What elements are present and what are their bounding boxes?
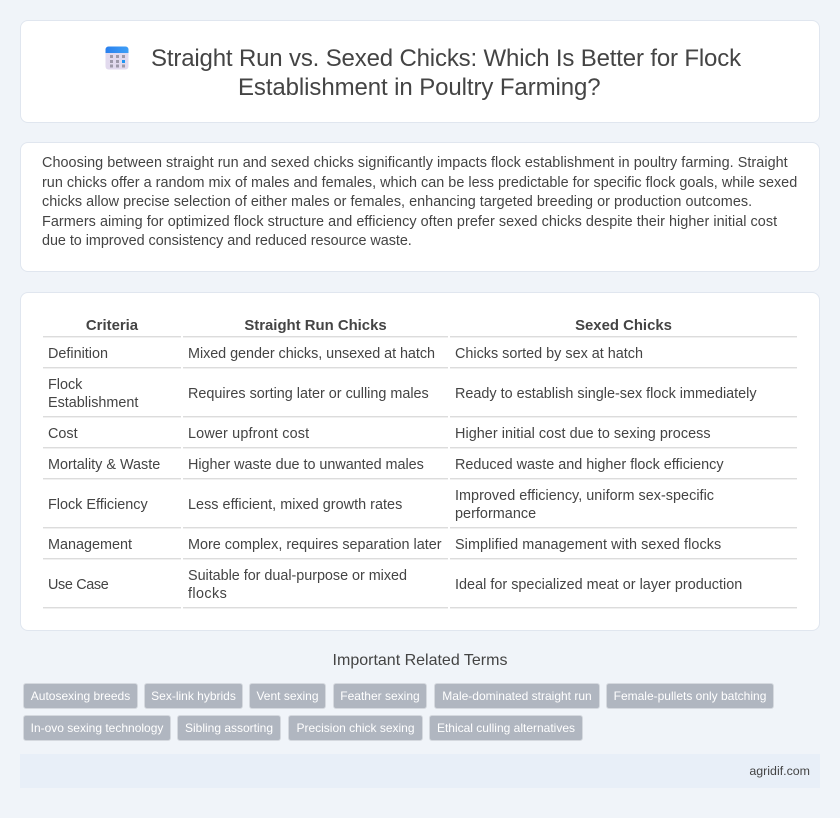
table header: Sexed Chicks: Sexed Chicks <box>575 318 672 334</box>
intro text: due to improved consistency and reduced resource waste. <box>42 233 412 249</box>
intro text <box>42 155 797 249</box>
table rows: Simplified management with sexed flocks <box>455 537 721 553</box>
table rows: More complex, requires separation later <box>188 537 442 553</box>
table rows: Establishment <box>48 395 138 411</box>
table rows: Higher waste due to unwanted males <box>188 457 424 473</box>
table rows: Mixed gender chicks, unsexed at hatch <box>188 346 435 362</box>
table rows: Higher initial cost due to sexing process <box>455 426 711 442</box>
table rows: Reduced waste and higher flock efficiency <box>455 457 724 473</box>
table rows: Flock <box>48 377 82 393</box>
table rows: Less efficient, mixed growth rates <box>188 497 402 513</box>
table rows: Definition <box>48 346 108 362</box>
table rows <box>43 336 797 609</box>
table rows: Cost <box>48 426 78 442</box>
title: Establishment in Poultry Farming? <box>238 74 601 101</box>
table rows: performance <box>455 506 536 522</box>
table header: Criteria: Criteria <box>86 318 138 334</box>
table rows: Ideal for specialized meat or layer production <box>455 577 742 593</box>
header panel <box>20 20 820 123</box>
table rows: Use Case <box>48 577 108 593</box>
table rows: Requires sorting later or culling males <box>188 386 429 402</box>
related terms tags: In-ovo sexing technology <box>31 721 163 735</box>
related terms tags: Ethical culling alternatives <box>437 721 575 735</box>
related terms tags: Sex-link hybrids <box>151 689 236 703</box>
comparison table panel <box>20 292 820 631</box>
related terms tags: Precision chick sexing <box>296 721 415 735</box>
table rows: Mortality & Waste <box>48 457 160 473</box>
icon: calendar <box>106 46 128 70</box>
table rows: Lower upfront cost <box>188 426 309 442</box>
table header: Straight Run Chicks: Straight Run Chicks <box>244 318 387 334</box>
table rows: Flock Efficiency <box>48 497 148 513</box>
intro text: run chicks offer a random mix of males and females, which can be less predictable for specific flock goals, while sexed <box>42 174 797 190</box>
table rows: flocks <box>188 586 227 602</box>
related terms tags: Vent sexing <box>256 689 319 703</box>
related terms tags: Sibling assorting <box>185 721 273 735</box>
table rows: Management <box>48 537 132 553</box>
table rows: Improved efficiency, uniform sex-specific <box>455 488 714 504</box>
table rows: Ready to establish single-sex flock immediately <box>455 386 757 402</box>
related terms tags: Male-dominated straight run <box>442 689 592 703</box>
related terms heading: Important Related Terms <box>333 652 507 669</box>
table rows: Chicks sorted by sex at hatch <box>455 346 643 362</box>
title: Straight Run vs. Sexed Chicks: Which Is Better for Flock <box>151 45 741 72</box>
table rows: Suitable for dual-purpose or mixed <box>188 568 407 584</box>
intro text: chicks allow precise selection of either males or females, enhancing targeted breeding or production outcomes. <box>42 194 752 210</box>
intro text: Choosing between straight run and sexed chicks significantly impacts flock establishment in poultry farming. Straight <box>42 155 788 171</box>
intro panel <box>20 142 820 272</box>
related terms tags: Female-pullets only batching <box>614 689 766 703</box>
title <box>151 45 742 101</box>
related terms tags: Autosexing breeds <box>31 689 130 703</box>
related terms tags <box>23 683 774 741</box>
footer bar <box>20 754 820 788</box>
related terms tags: Feather sexing <box>340 689 420 703</box>
intro text: Farmers aiming for optimized flock structure and efficiency often prefer sexed chicks despite their higher initial cost <box>42 214 777 230</box>
footer source: agridif.com <box>749 764 810 778</box>
